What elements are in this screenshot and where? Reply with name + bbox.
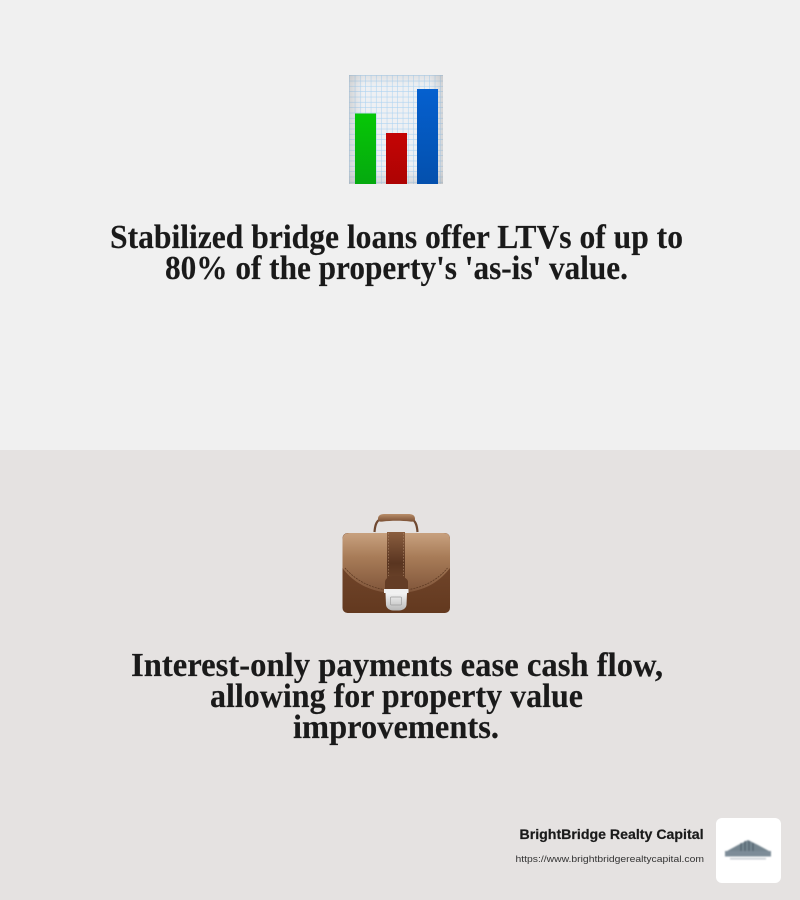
- heading: interest-only statement: allowing for property value: [210, 678, 583, 715]
- icon: briefcase: [342, 514, 450, 613]
- panel: stabilized bridge loans: [0, 0, 800, 450]
- panel: interest-only payments: [0, 450, 800, 900]
- heading: interest-only statement: Interest-only payments ease cash flow,: [131, 647, 663, 684]
- heading: LTV statement: 80% of the property's 'as-is' value.: [165, 250, 628, 287]
- icon: bar chart: [349, 75, 443, 184]
- logo card: [716, 818, 781, 883]
- heading: interest-only statement: [131, 647, 663, 746]
- heading: LTV statement: [110, 219, 683, 287]
- heading: interest-only statement: improvements.: [293, 709, 499, 746]
- footer: website url: https://www.brightbridgerealtycapital.com: [516, 854, 704, 865]
- heading: LTV statement: Stabilized bridge loans offer LTVs of up to: [110, 219, 683, 256]
- footer: company name: BrightBridge Realty Capital: [520, 827, 704, 842]
